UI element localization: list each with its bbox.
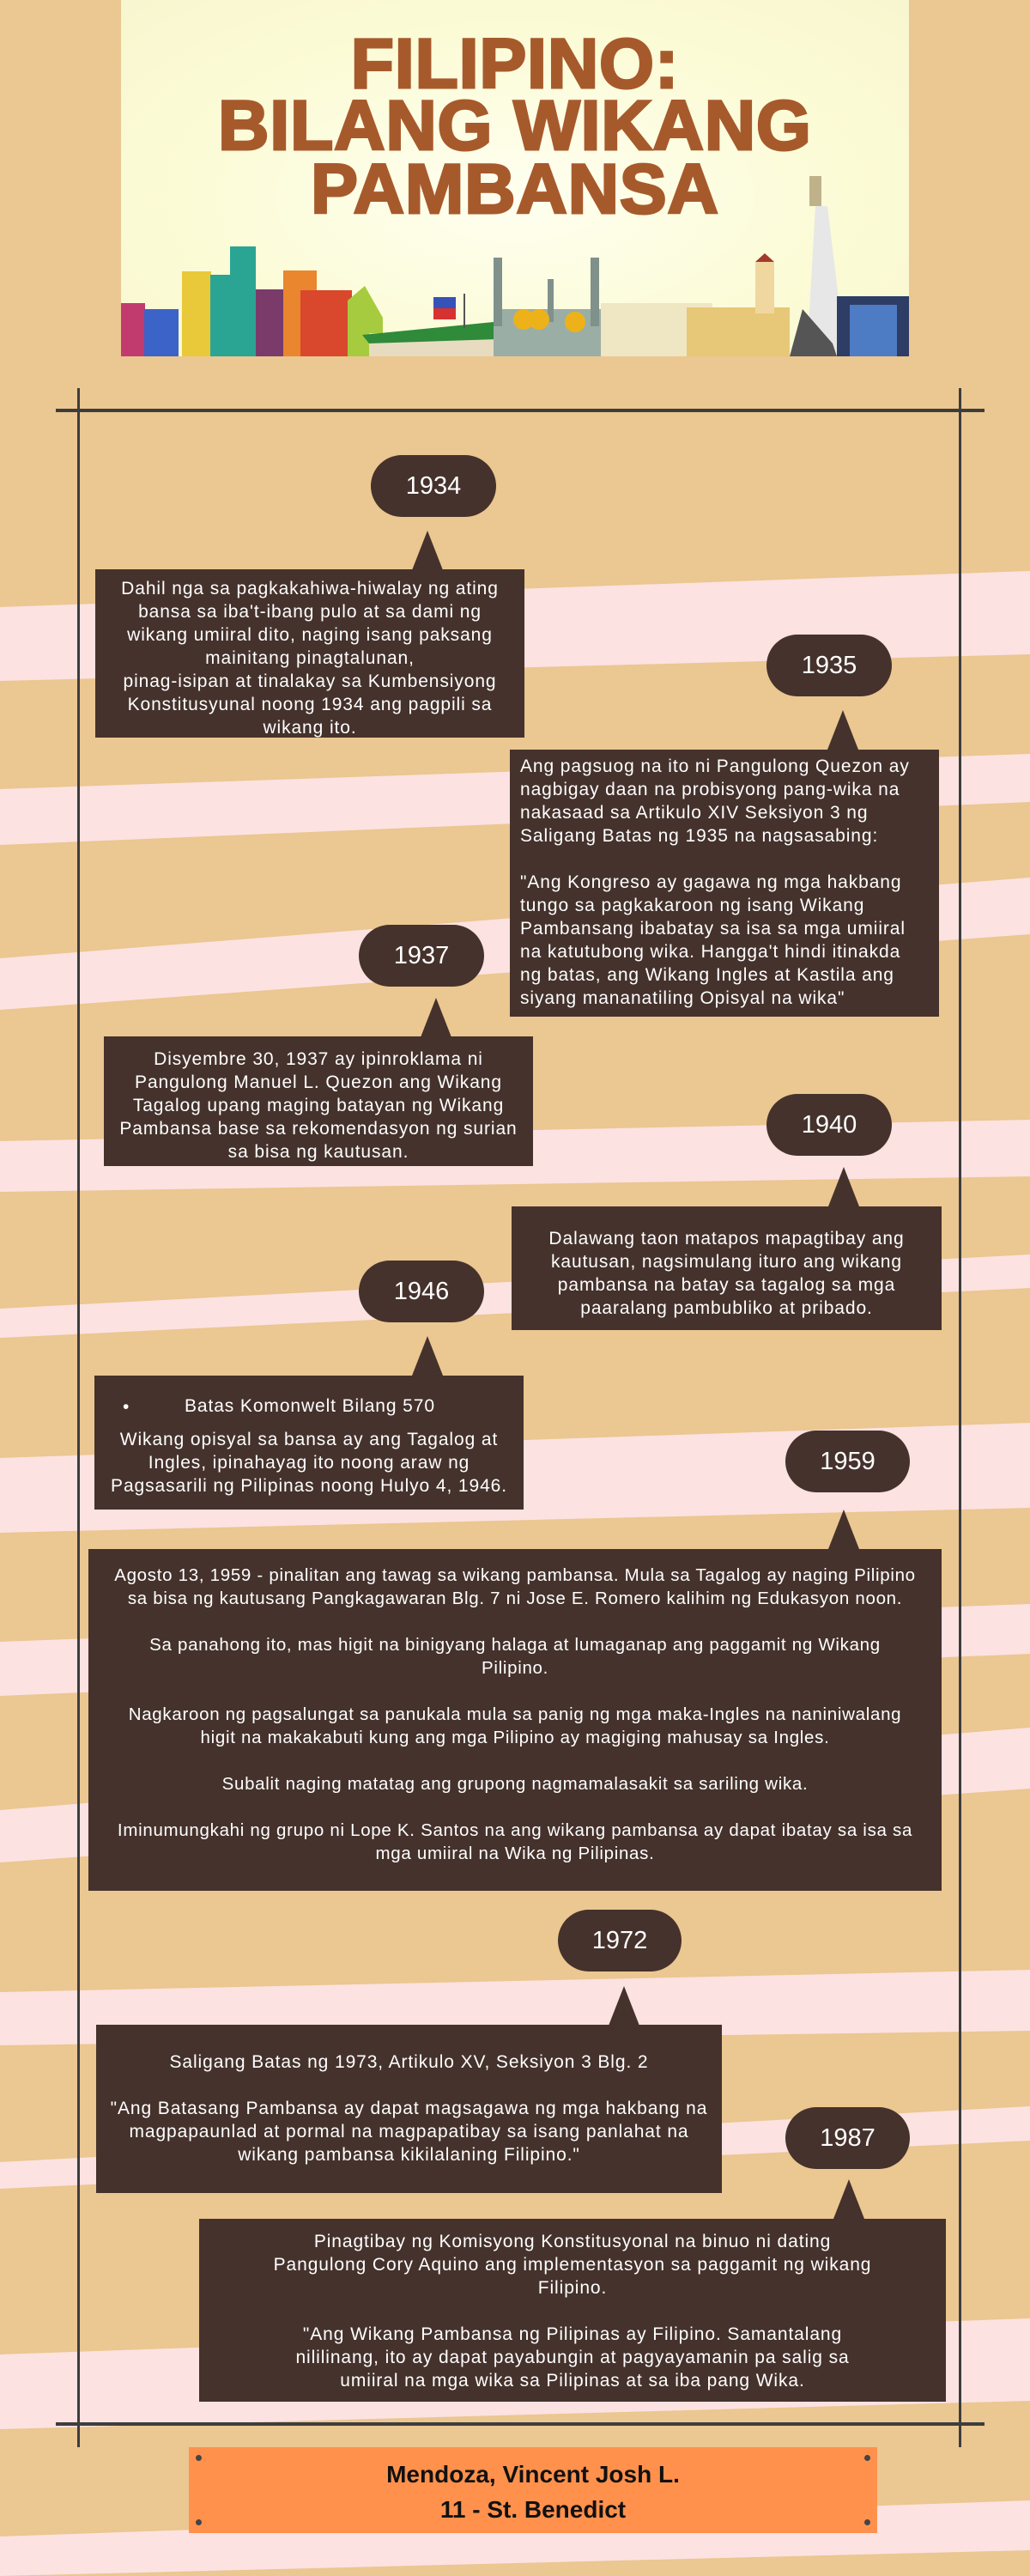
- text 1937: Tagalog upang maging batayan ng Wikang: [133, 1096, 504, 1115]
- text 1935: na katutubong wika. Hangga't hindi itinakda: [520, 942, 900, 962]
- year 1959: [785, 1431, 910, 1492]
- text 1959: Subalit naging matatag ang grupong nagmamalasakit sa sariling wika.: [222, 1774, 808, 1794]
- year 1937: [359, 925, 484, 987]
- text 1934: [95, 569, 524, 738]
- year 1987: [785, 2107, 910, 2169]
- event 1940: [512, 1094, 942, 1330]
- year 1972: 1972: [592, 1927, 647, 1954]
- text 1972: wikang pambansa kikilalaning Filipino.": [238, 2145, 580, 2165]
- footer: author name plate: [189, 2447, 877, 2533]
- pointer: [609, 1986, 639, 2026]
- text 1935: Pambansang ibabatay sa isa sa mga umiiral: [520, 919, 906, 939]
- year 1987: 1987: [820, 2124, 876, 2152]
- text 1946: Pagsasarili ng Pilipinas noong Hulyo 4, 1946.: [111, 1476, 507, 1496]
- pointer: [421, 998, 451, 1037]
- text 1937: Pangulong Manuel L. Quezon ang Wikang: [135, 1072, 502, 1092]
- title: PAMBANSA: [311, 150, 719, 228]
- text 1934: Konstitusyunal noong 1934 ang pagpili sa: [128, 695, 492, 714]
- event 1937: [104, 925, 533, 1166]
- text 1959: Sa panahong ito, mas higit na binigyang halaga at lumaganap ang paggamit ng Wikang: [149, 1635, 881, 1655]
- event 1946: [94, 1261, 524, 1510]
- pointer: [412, 1336, 443, 1376]
- title: FILIPINO:: [351, 25, 679, 103]
- title: [218, 25, 812, 228]
- text 1940: [512, 1206, 942, 1330]
- text 1959: Pilipino.: [482, 1658, 548, 1678]
- text 1934: pinag-isipan at tinalakay sa Kumbensiyong: [124, 671, 496, 691]
- year 1972: [558, 1910, 682, 1971]
- title: BILANG WIKANG: [218, 87, 812, 165]
- year 1935: 1935: [802, 651, 857, 678]
- text 1959: higit na makakabuti kung ang mga Pilipino ay magiging mahusay sa Ingles.: [201, 1728, 829, 1747]
- event 1935: [510, 635, 939, 1017]
- event 1972: [96, 1910, 722, 2193]
- text 1946: [94, 1376, 524, 1510]
- year 1940: 1940: [802, 1111, 857, 1139]
- text 1987: umiiral na mga wika sa Pilipinas at sa iba pang Wika.: [340, 2371, 805, 2391]
- text 1937: Disyembre 30, 1937 ay ipinroklama ni: [154, 1049, 483, 1069]
- text 1972: magpapaunlad at pormal na magpapatibay sa isang panlahat na: [129, 2122, 689, 2142]
- text 1935: [510, 750, 939, 1017]
- text 1940: pambansa na batay sa tagalog sa mga: [558, 1275, 895, 1295]
- text 1959: sa bisa ng kautusang Pangkagawaran Blg. 7 ni Jose E. Romero kalihim ng Edukasyon noon.: [128, 1589, 902, 1608]
- text 1946: •: [123, 1397, 130, 1417]
- text 1935: ng batas, ang Wikang Ingles at Kastila ang: [520, 965, 894, 985]
- pointer: [833, 2179, 864, 2219]
- pointer: [828, 1167, 859, 1206]
- text 1940: paaralang pambubliko at pribado.: [580, 1298, 873, 1318]
- text 1934: mainitang pinagtalunan,: [205, 648, 415, 668]
- text 1937: sa bisa ng kautusan.: [228, 1142, 409, 1162]
- text 1935: Ang pagsuog na ito ni Pangulong Quezon ay: [520, 756, 910, 776]
- text 1987: "Ang Wikang Pambansa ng Pilipinas ay Filipino. Samantalang: [303, 2324, 842, 2344]
- text 1935: "Ang Kongreso ay gagawa ng mga hakbang: [520, 872, 901, 892]
- text 1987: nililinang, ito ay dapat payabungin at pagyayamanin pa salig sa: [295, 2348, 850, 2367]
- text 1959: Iminumungkahi ng grupo ni Lope K. Santos na ang wikang pambansa ay dapat ibatay sa isa sa: [118, 1820, 912, 1840]
- text 1940: kautusan, nagsimulang ituro ang wikang: [551, 1252, 902, 1272]
- pointer: [412, 531, 443, 570]
- text 1935: nagbigay daan na probisyong pang-wika na: [520, 780, 900, 799]
- pointer: [827, 710, 858, 750]
- text 1987: Pinagtibay ng Komisyong Konstitusyonal na binuo ni dating: [314, 2232, 831, 2251]
- text 1959: Nagkaroon ng pagsalungat sa panukala mula sa panig ng mga maka-Ingles na naniniwalang: [129, 1704, 901, 1724]
- text 1935: nakasaad sa Artikulo XIV Seksiyon 3 ng: [520, 803, 868, 823]
- author text: [386, 2461, 680, 2523]
- year 1946: [359, 1261, 484, 1322]
- year 1934: 1934: [406, 472, 461, 500]
- text 1934: Dahil nga sa pagkakahiwa-hiwalay ng ating: [121, 579, 499, 598]
- text 1946: Wikang opisyal sa bansa ay ang Tagalog at: [120, 1430, 498, 1449]
- text 1946: Ingles, ipinahayag ito noong araw ng: [148, 1453, 470, 1473]
- text 1959: mga umiiral na Wika ng Pilipinas.: [375, 1844, 655, 1863]
- text 1935: siyang mananatiling Opisyal na wika": [520, 988, 845, 1008]
- year 1937: 1937: [394, 941, 449, 969]
- event 1959: [88, 1431, 942, 1891]
- text 1959: Agosto 13, 1959 - pinalitan ang tawag sa wikang pambansa. Mula sa Tagalog ay naging Pilipino: [114, 1565, 916, 1585]
- header panel: [121, 0, 909, 356]
- author text: 11 - St. Benedict: [440, 2496, 626, 2523]
- text 1987: Filipino.: [538, 2278, 607, 2298]
- event 1987: [199, 2107, 946, 2402]
- pointer: [828, 1510, 859, 1549]
- year 1935: [766, 635, 892, 696]
- text 1972: "Ang Batasang Pambansa ay dapat magsagawa ng mga hakbang na: [111, 2099, 707, 2118]
- text 1934: bansa sa iba't-ibang pulo at sa dami ng: [138, 602, 482, 622]
- text 1937: [104, 1036, 533, 1166]
- text 1972: Saligang Batas ng 1973, Artikulo XV, Seksiyon 3 Blg. 2: [170, 2052, 649, 2072]
- year 1934: [371, 455, 496, 517]
- text 1987: Pangulong Cory Aquino ang implementasyon sa paggamit ng wikang: [274, 2255, 871, 2275]
- text 1935: tungo sa pagkakaroon ng isang Wikang: [520, 896, 864, 915]
- text 1987: [199, 2219, 946, 2402]
- text 1935: Saligang Batas ng 1935 na nagsasabing:: [520, 826, 878, 846]
- skyline illustration: [121, 176, 909, 356]
- event 1934: [95, 455, 524, 738]
- text 1959: [88, 1549, 942, 1891]
- year 1959: 1959: [820, 1448, 876, 1475]
- text 1940: Dalawang taon matapos mapagtibay ang: [548, 1229, 905, 1249]
- text 1934: wikang umiiral dito, naging isang paksang: [127, 625, 493, 645]
- year 1940: [766, 1094, 892, 1156]
- text 1972: [96, 2025, 722, 2193]
- text 1946: Batas Komonwelt Bilang 570: [185, 1396, 435, 1416]
- year 1946: 1946: [394, 1278, 449, 1305]
- text 1934: wikang ito.: [263, 718, 357, 738]
- text 1937: Pambansa base sa rekomendasyon ng surian: [119, 1119, 518, 1139]
- author text: Mendoza, Vincent Josh L.: [386, 2461, 680, 2488]
